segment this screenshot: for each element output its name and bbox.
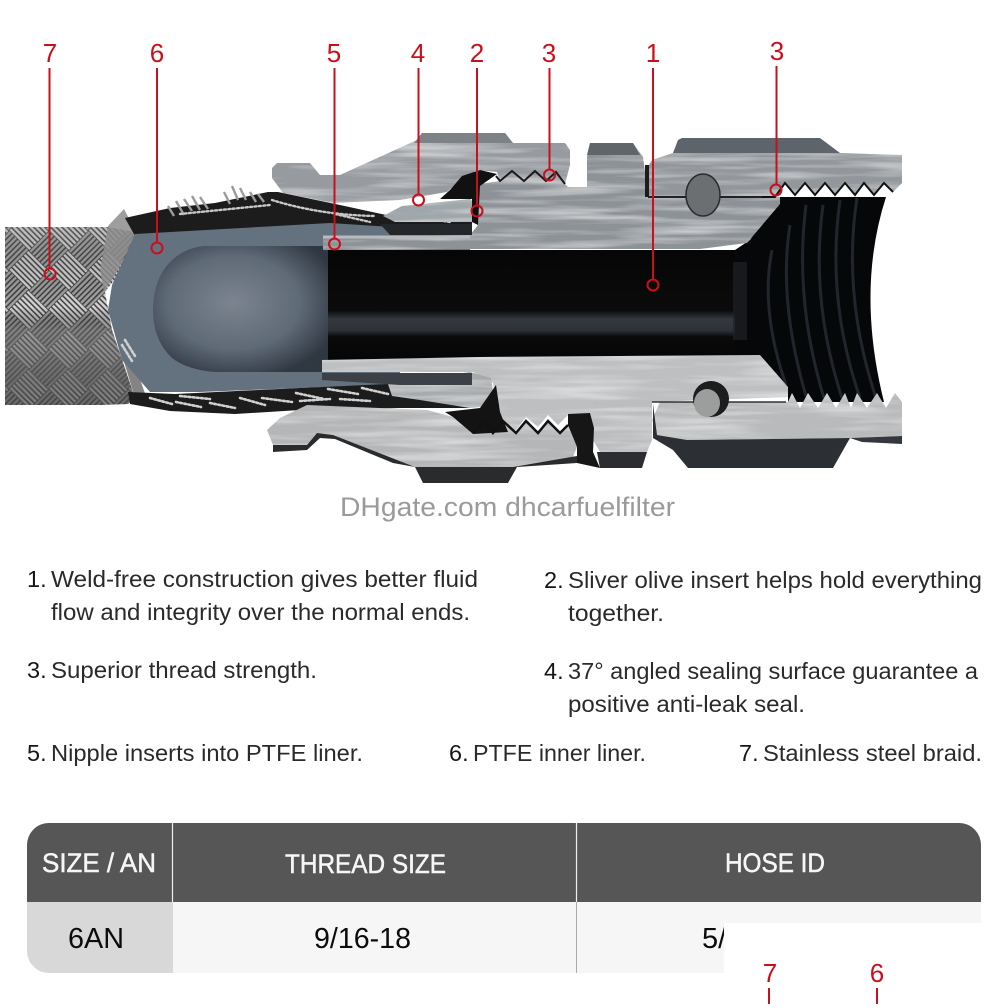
upper left nut — [272, 133, 570, 203]
white overlay patch with stray labels — [724, 923, 1008, 1008]
cell: 6AN: 6AN — [68, 923, 124, 955]
item 1: 1. — [27, 566, 47, 592]
lower right nut — [652, 393, 902, 440]
watermark: DHgate.com dhcarfuelfilter — [340, 492, 675, 522]
upper main body — [323, 143, 780, 250]
item 3: 3. — [27, 657, 47, 683]
callout 2 — [470, 38, 484, 216]
olive insert — [383, 199, 478, 222]
specification table — [27, 823, 981, 973]
lower olive — [388, 372, 494, 408]
item 1: Weld-free construction gives better fluid — [51, 566, 478, 592]
item 2: together. — [568, 600, 664, 626]
lower left nut — [267, 405, 577, 467]
callout 7: 7 — [43, 38, 57, 68]
callout 3 left — [542, 38, 556, 180]
callout 3 left: 3 — [542, 38, 556, 68]
stray callout 7 — [763, 958, 777, 1004]
header: size: SIZE / AN — [42, 848, 156, 878]
item 6: PTFE inner liner. — [473, 740, 646, 766]
item 2: Sliver olive insert helps hold everything — [568, 567, 982, 593]
callout 2: 2 — [470, 38, 484, 68]
upper right nut — [647, 153, 902, 197]
item 2: 2. — [544, 567, 564, 593]
callout 6: 6 — [150, 38, 164, 68]
metal castings — [267, 133, 902, 467]
item 4: 37° angled sealing surface guarantee a — [568, 658, 979, 684]
fitting cutaway diagram — [5, 133, 902, 483]
header: hose id: HOSE ID — [725, 848, 825, 878]
callout 1: 1 — [646, 38, 660, 68]
callout 7 — [43, 38, 57, 280]
lower centre body — [593, 400, 652, 452]
header: thread size: THREAD SIZE — [285, 849, 446, 879]
retaining wire upper — [686, 174, 720, 216]
stray callout 6: 6 — [870, 958, 884, 988]
item 4 — [544, 658, 979, 717]
PTFE liner — [108, 223, 470, 392]
feature list — [27, 566, 982, 766]
item 7: 7. — [739, 740, 759, 766]
item 4: 4. — [544, 658, 564, 684]
item 5: Nipple inserts into PTFE liner. — [51, 740, 363, 766]
dark faces and gaps — [273, 133, 902, 483]
item 7: Stainless steel braid. — [763, 740, 982, 766]
stray callout 7: 7 — [763, 958, 777, 988]
bore — [328, 250, 748, 360]
callout 1 — [646, 38, 660, 290]
item 6: 6. — [449, 740, 469, 766]
item 2 — [544, 567, 982, 626]
cell: hose id: 5/8 — [702, 923, 742, 955]
steel braided hose — [5, 209, 148, 405]
stray callout 6 — [870, 958, 884, 1004]
retaining wire lower — [693, 381, 729, 417]
frayed braid above liner — [125, 186, 472, 236]
lower braid beads — [122, 340, 470, 414]
item 1: flow and integrity over the normal ends. — [51, 599, 470, 625]
cell: thread: 9/16-18 — [314, 923, 411, 955]
callout 4: 4 — [411, 38, 425, 68]
callout 5 — [327, 38, 341, 250]
callout 6 — [150, 38, 164, 254]
callout 5: 5 — [327, 38, 341, 68]
lower nipple and body — [322, 355, 788, 430]
item 4: positive anti-leak seal. — [568, 691, 805, 717]
liner inner cavity — [153, 246, 332, 372]
callouts — [43, 36, 784, 290]
item 5: 5. — [27, 740, 47, 766]
callout 4 — [411, 38, 425, 206]
item 3: Superior thread strength. — [51, 657, 317, 683]
threaded end opening — [735, 197, 886, 402]
item 1 — [27, 566, 478, 625]
callout 3 right — [770, 36, 784, 196]
callout 3 right: 3 — [770, 36, 784, 66]
